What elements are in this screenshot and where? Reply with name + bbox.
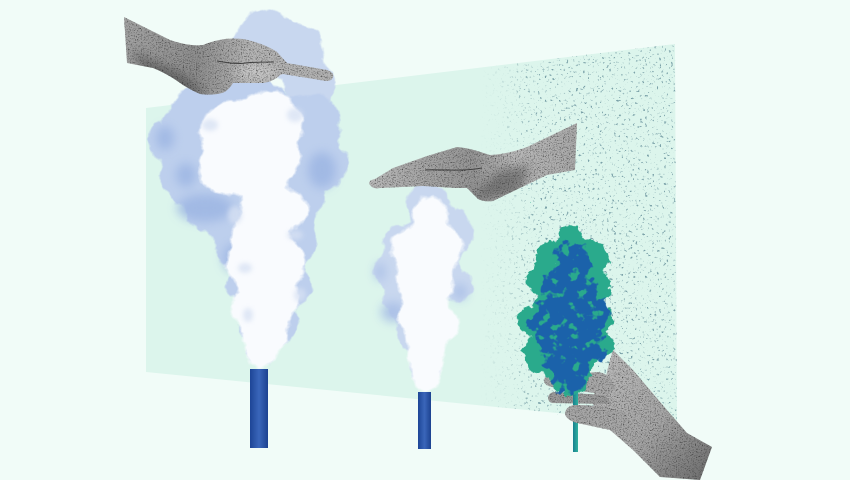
- illustration: [124, 9, 712, 480]
- middle chimney: [418, 392, 431, 449]
- tree foliage: [517, 225, 615, 398]
- darker blue shading on cloud: [156, 126, 336, 272]
- left chimney: [250, 369, 268, 448]
- hand: lower right, palm and upper fingers: [544, 350, 712, 480]
- hand: lower right, thumb over trunk: [565, 405, 640, 440]
- darker blue shading on small cloud: [375, 263, 467, 322]
- small smoke cloud: [372, 183, 474, 392]
- speckle texture on panel: [480, 40, 680, 430]
- soft inner folds of large cloud: [202, 108, 306, 322]
- hand: upper left, flat over large cloud: [124, 17, 333, 95]
- tree trunk: [573, 392, 578, 452]
- panel: skewed mint backdrop: [146, 44, 677, 425]
- hand: middle, flat over small cloud: [369, 123, 577, 201]
- large smoke cloud: [149, 8, 348, 367]
